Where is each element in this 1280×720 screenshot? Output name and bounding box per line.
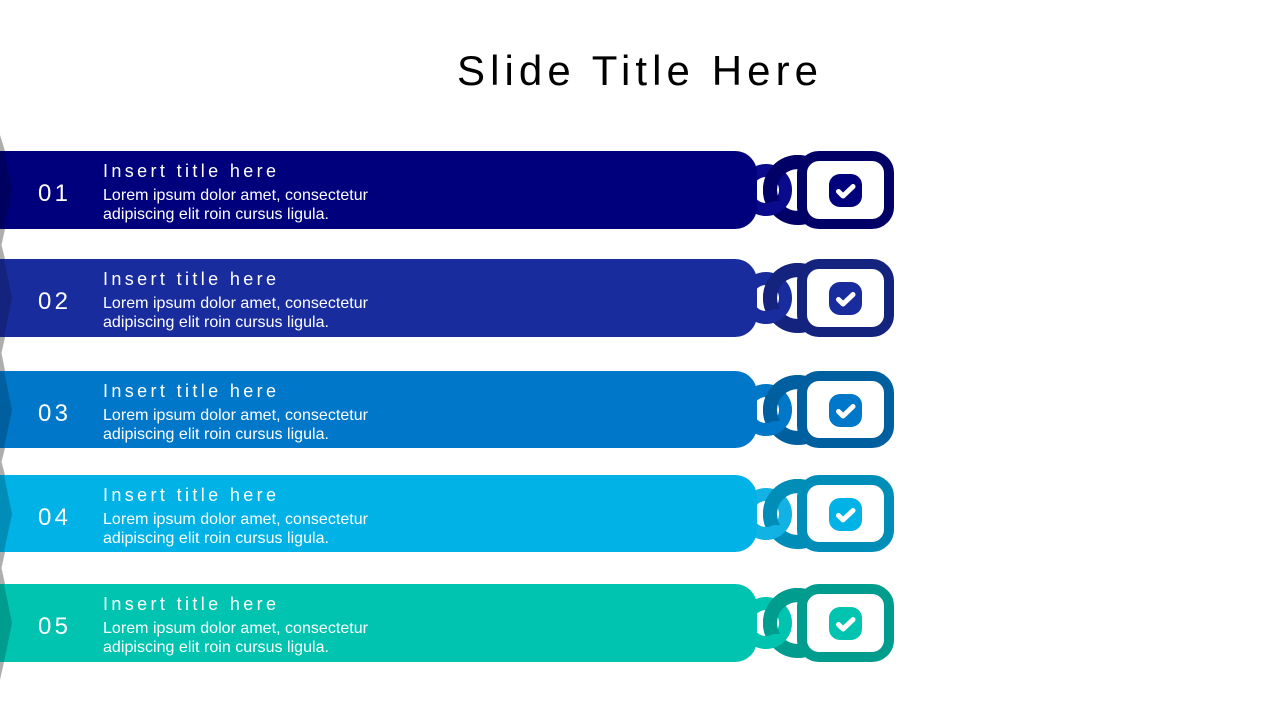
chain link icon 5 [746,589,889,657]
text block 3 [103,381,369,443]
text block 1 [103,161,369,223]
bar 1 [0,151,757,229]
text block 5: Insert title here [103,594,276,614]
number 2: 02 [38,288,68,315]
row 1 [0,151,889,229]
chevron 1 [0,151,12,229]
chevron 3 [0,371,12,448]
text block 2 [103,269,369,331]
chevron 5 [0,584,12,662]
row 2 [0,259,889,337]
row 3 [0,371,889,448]
text block 4: Lorem ipsum dolor amet, consectetur [103,511,369,528]
text block 3: adipiscing elit roin cursus ligula. [103,426,329,443]
text block 4: adipiscing elit roin cursus ligula. [103,530,329,547]
number 5: 05 [38,613,68,640]
text block 2: Insert title here [103,269,276,289]
text block 1: adipiscing elit roin cursus ligula. [103,206,329,223]
text block 3: Insert title here [103,381,276,401]
bar 3 [0,371,757,448]
number 4: 04 [38,504,68,531]
text block 5 [103,594,369,656]
chain link icon 4 [746,480,889,547]
chevron 4 [0,475,12,552]
bar 4 [0,475,757,552]
text block 4: Insert title here [103,485,276,505]
text block 2: Lorem ipsum dolor amet, consectetur [103,295,369,312]
text block 4 [103,485,369,547]
chain link icon 2 [746,264,889,332]
text block 3: Lorem ipsum dolor amet, consectetur [103,407,369,424]
gray backing ribbon [0,135,5,680]
text block 2: adipiscing elit roin cursus ligula. [103,314,329,331]
chain link icon 1 [746,156,889,224]
chain link icon 3 [746,376,889,443]
text block 1: Insert title here [103,161,276,181]
bar 5 [0,584,757,662]
number 3: 03 [38,400,68,427]
text block 5: Lorem ipsum dolor amet, consectetur [103,620,369,637]
title: Slide Title Here [457,47,818,94]
bar 2 [0,259,757,337]
text block 1: Lorem ipsum dolor amet, consectetur [103,187,369,204]
chevron 2 [0,259,12,337]
text block 5: adipiscing elit roin cursus ligula. [103,639,329,656]
row 4 [0,475,889,552]
row 5 [0,584,889,662]
number 1: 01 [38,180,68,207]
